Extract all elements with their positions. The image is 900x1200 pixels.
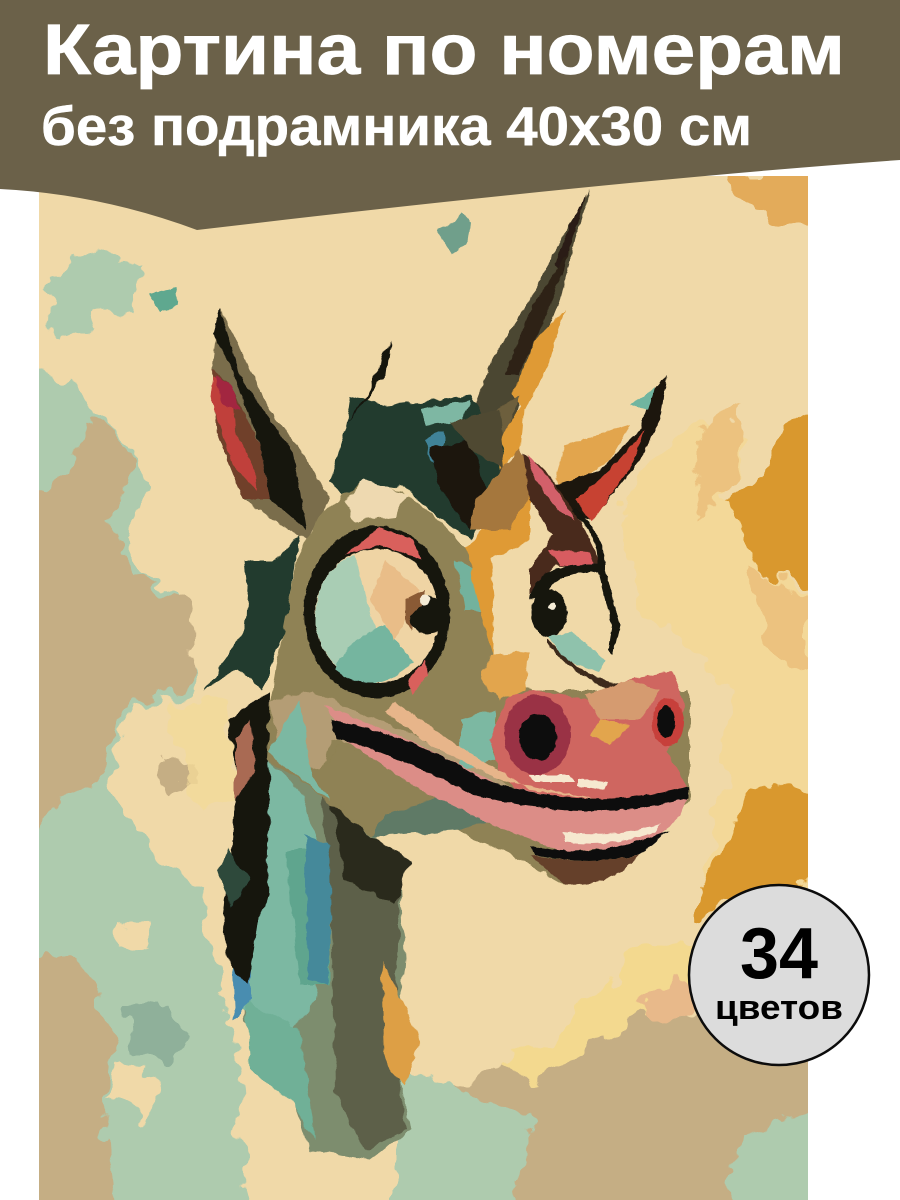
badge: 34 colours — [689, 885, 869, 1065]
unicorn left eye — [304, 526, 450, 698]
unicorn right eye and brow — [522, 454, 620, 688]
unicorn horn — [476, 189, 590, 474]
unicorn right ear — [555, 375, 667, 522]
unicorn forelock — [330, 340, 505, 540]
icon: teal paint spots — [149, 212, 471, 312]
badge: 34 colours: 34 — [740, 914, 818, 994]
unicorn left ear — [210, 308, 330, 540]
unicorn snout and mouth — [325, 671, 688, 885]
painting: paint-by-numbers unicorn — [20, 170, 830, 1200]
unicorn neck and mane — [205, 535, 420, 1160]
badge: 34 colours: цветов — [715, 989, 843, 1027]
unicorn head — [267, 450, 690, 885]
background: green and tan paint patches — [20, 170, 830, 1200]
subtitle: без подрамника 40х30 см — [41, 95, 752, 157]
header banner — [0, 0, 900, 230]
title: Картина по номерам — [43, 11, 845, 90]
